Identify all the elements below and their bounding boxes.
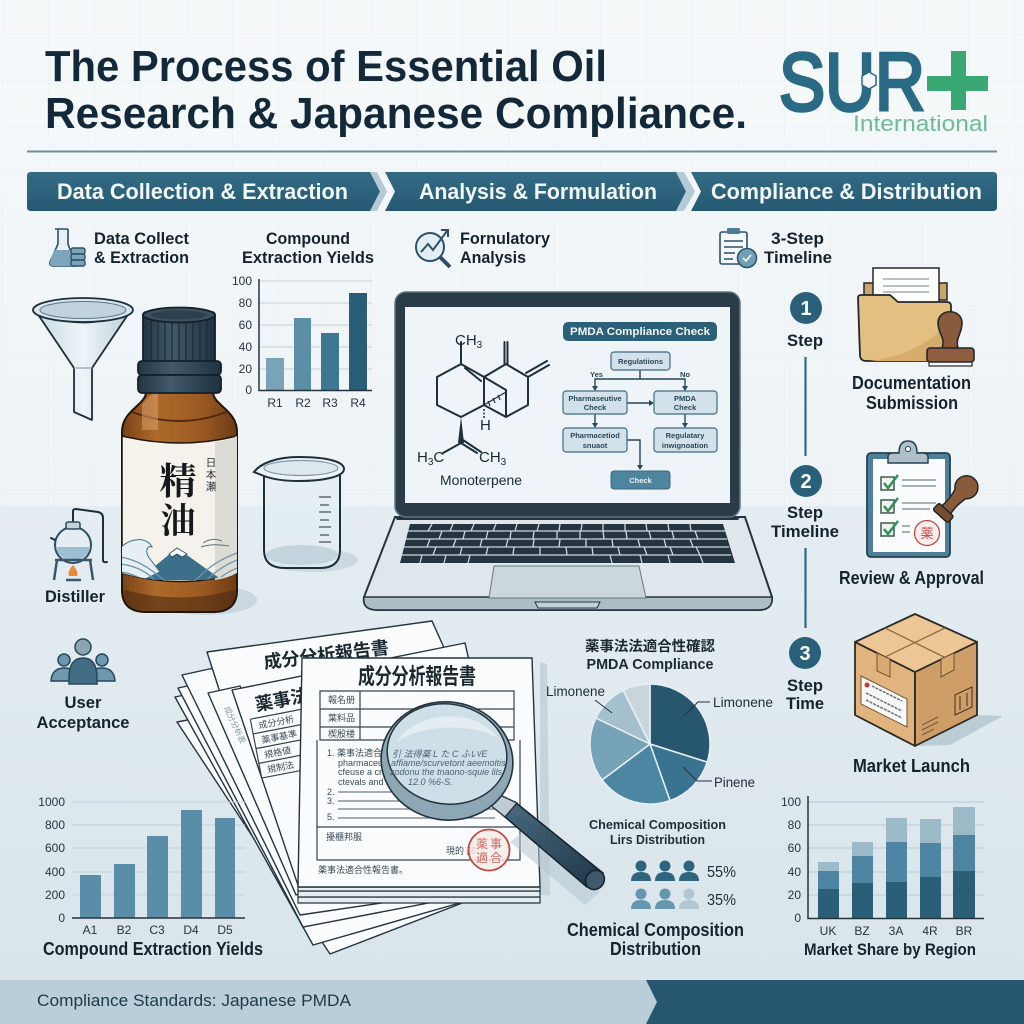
main report page: 5. bbox=[327, 812, 335, 822]
flowchart title bbox=[563, 322, 717, 341]
essential oil bottle bbox=[120, 308, 257, 615]
heading: 3-Step Timeline: 3-Step bbox=[771, 229, 824, 248]
red approval seal: 事 bbox=[490, 837, 502, 851]
bottle label: 日 bbox=[206, 457, 216, 469]
molecule: monoterpene: CH bbox=[479, 449, 501, 466]
pie chart: chemical composition bbox=[590, 684, 712, 804]
magnifying glass: zodonu the tnaono-squie lils bbox=[389, 767, 503, 777]
caption: composition distribution bbox=[589, 817, 726, 847]
bar chart: compound extraction yields A1-D5: 800 bbox=[45, 818, 65, 832]
title bbox=[45, 42, 747, 138]
bottle label: 精 bbox=[160, 451, 196, 505]
bar chart: extraction yields R1-R4: 20 bbox=[239, 362, 252, 376]
footer text: Compliance Standards: Japanese PMDA bbox=[37, 992, 351, 1010]
bar chart: extraction yields R1-R4: R3 bbox=[322, 396, 338, 410]
stamp bbox=[927, 312, 974, 366]
icon: folder with stamp bbox=[858, 268, 974, 366]
flowchart title: PMDA Compliance Check bbox=[570, 326, 711, 338]
heading: Compound Extraction Yields: Compound bbox=[266, 229, 350, 248]
bar chart: extraction yields R1-R4: R1 bbox=[267, 396, 283, 410]
bar chart: extraction yields R1-R4: R2 bbox=[295, 396, 311, 410]
trackpad bbox=[489, 566, 646, 598]
bar chart: compound extraction yields A1-D5 bbox=[38, 795, 263, 959]
stacked bar chart: market share by region: UK bbox=[820, 924, 836, 938]
main report page: cfeuse a cre bbox=[338, 767, 387, 777]
pictogram: people percentages: 35% bbox=[707, 892, 736, 909]
main report page: 報名册 bbox=[328, 694, 355, 705]
molecule: monoterpene: 3 bbox=[477, 340, 483, 351]
pie labels: Pinene bbox=[714, 774, 755, 790]
bar chart: extraction yields R1-R4: 40 bbox=[239, 340, 252, 354]
bar chart: extraction yields R1-R4: 80 bbox=[239, 296, 252, 310]
main report page: 楔殷楼 bbox=[328, 728, 355, 739]
footer bar bbox=[0, 980, 1024, 1024]
bar chart: extraction yields R1-R4: 60 bbox=[239, 318, 252, 332]
step 3: Time bbox=[786, 694, 824, 713]
label: user acceptance bbox=[36, 693, 130, 732]
flowchart: PMDA compliance check: Check bbox=[629, 476, 653, 485]
step 2 bbox=[771, 465, 839, 541]
heading: Fornulatory Analysis bbox=[460, 229, 551, 267]
step 3: 3 bbox=[799, 643, 811, 665]
icon: clipboard with seal and stamp bbox=[867, 441, 983, 557]
bar chart: compound extraction yields A1-D5: 200 bbox=[45, 888, 65, 902]
bar chart: extraction yields R1-R4: 100 bbox=[232, 274, 252, 288]
heading: Data Collect & Extraction: & Extraction bbox=[94, 248, 189, 267]
step 1: 1 bbox=[800, 298, 812, 320]
magnifying glass: 12.0 %6-S. bbox=[408, 777, 453, 787]
heading: Fornulatory Analysis: Analysis bbox=[460, 248, 526, 267]
flowchart: PMDA compliance check: inwignoation bbox=[662, 441, 709, 450]
flowchart: PMDA compliance check: Pharmaseutive bbox=[568, 394, 622, 403]
laptop bbox=[364, 292, 772, 610]
bar chart: compound extraction yields A1-D5: 400 bbox=[45, 865, 65, 879]
stacked bar chart: market share by region: BZ bbox=[854, 924, 870, 938]
fanned back pages: 成分分析報告書 bbox=[262, 636, 390, 673]
pictogram: people percentages: 55% bbox=[707, 864, 736, 881]
heading: PMDA compliance bbox=[585, 638, 715, 673]
main report page: 1. 薬事法適合性 bbox=[327, 747, 391, 758]
stacked bar chart: market share by region: 20 bbox=[788, 888, 801, 902]
heading: chemical composition distribution: Chemical Composition bbox=[567, 919, 744, 940]
red seal: 薬 bbox=[920, 526, 934, 541]
heading: Compound Extraction Yields: Extraction Yields bbox=[242, 248, 374, 267]
logo: SUR+ International: SUR bbox=[779, 37, 925, 128]
pie leader lines bbox=[595, 700, 712, 781]
heading: Compound Extraction Yields bbox=[242, 229, 374, 267]
main report page: pharmaceu bbox=[338, 758, 383, 768]
main report page: 擾櫃邦服 bbox=[326, 831, 362, 842]
main report page bbox=[298, 658, 550, 903]
stacked bar chart: market share by region: 60 bbox=[788, 841, 801, 855]
heading: 3-Step Timeline bbox=[764, 229, 832, 267]
laptop screen frame bbox=[395, 292, 740, 517]
fanned back pages: 薬事法 bbox=[253, 685, 310, 715]
molecule: monoterpene: H bbox=[480, 417, 491, 434]
red approval seal: 薬 bbox=[476, 837, 488, 851]
molecule: monoterpene: CH bbox=[455, 332, 477, 349]
label: review and approval: Review & Approval bbox=[839, 567, 984, 588]
stacked bar chart: market share by region: 4R bbox=[922, 924, 938, 938]
banner stage 2 bbox=[385, 172, 686, 211]
bottle cap bbox=[138, 308, 221, 393]
step 2: 2 bbox=[800, 471, 812, 493]
molecule: monoterpene: 3 bbox=[428, 457, 434, 468]
wooden stamp bbox=[932, 471, 983, 524]
main report page: 2. bbox=[327, 787, 335, 797]
fanned back pages: 薬事基準 bbox=[260, 728, 298, 745]
main report page: 現的 部 bbox=[446, 845, 476, 856]
icon: shipping box bbox=[855, 614, 1003, 746]
stacked bar chart: market share by region: 40 bbox=[788, 865, 801, 879]
label: market launch: Market Launch bbox=[853, 755, 970, 776]
heading: chemical composition distribution bbox=[567, 919, 744, 959]
caption: composition distribution: Lirs Distribution bbox=[610, 832, 705, 847]
pie labels: Limonene bbox=[546, 683, 605, 699]
bar chart: extraction yields R1-R4: 0 bbox=[245, 383, 252, 397]
bar chart: compound extraction yields A1-D5: 1000 bbox=[38, 795, 65, 809]
flowchart: PMDA compliance check: Pharmacetiod bbox=[570, 431, 620, 440]
banner stage 1 bbox=[27, 172, 380, 211]
fanned back pages: 規制法 bbox=[266, 759, 295, 775]
fanned back pages bbox=[175, 621, 520, 954]
bar chart: compound extraction yields A1-D5: A1 bbox=[83, 923, 98, 937]
molecule: monoterpene: C bbox=[433, 449, 444, 466]
icon: distiller: Distiller bbox=[45, 587, 105, 606]
flowchart: PMDA compliance check: Check bbox=[674, 403, 697, 412]
icon: user group bbox=[51, 639, 115, 684]
red approval seal bbox=[468, 830, 510, 870]
title: Research & Japanese Compliance. bbox=[45, 89, 747, 138]
bar chart: compound extraction yields A1-D5: C3 bbox=[149, 923, 165, 937]
flowchart: PMDA compliance check: No bbox=[680, 370, 690, 379]
red approval seal: 適 bbox=[476, 851, 488, 865]
magnifying glass: affiame/scurvetont aeemoltis bbox=[391, 758, 506, 768]
bar chart: compound extraction yields A1-D5: Compound Extraction Yields bbox=[43, 938, 263, 959]
main report page: 薬事法適合性報告書。 bbox=[318, 864, 408, 875]
banner stage 1: Data Collection & Extraction bbox=[57, 179, 348, 204]
timeline: three steps bbox=[771, 292, 839, 713]
fanned back pages: 規格値 bbox=[263, 744, 292, 760]
molecule: monoterpene: Monoterpene bbox=[440, 473, 522, 488]
magnifying glass bbox=[373, 693, 608, 905]
bar chart: compound extraction yields A1-D5: 0 bbox=[58, 911, 65, 925]
bar chart: compound extraction yields A1-D5: B2 bbox=[117, 923, 132, 937]
stacked bar chart: market share by region: 3A bbox=[889, 924, 903, 938]
step 3 bbox=[786, 637, 824, 713]
molecule: monoterpene: H bbox=[417, 449, 428, 466]
step 1 bbox=[787, 292, 823, 350]
flowchart: PMDA compliance check: PMDA bbox=[674, 394, 697, 403]
step 3: Step bbox=[787, 676, 823, 695]
heading: Data Collect & Extraction bbox=[94, 229, 189, 267]
fanned back pages: 成分分析表 bbox=[222, 705, 248, 745]
heading: chemical composition distribution: Distribution bbox=[610, 938, 701, 959]
bottle label: 本 bbox=[206, 468, 217, 481]
logo: SUR+ International: International bbox=[853, 111, 988, 136]
stacked bar chart: market share by region: Market Share by Region bbox=[804, 940, 976, 959]
molecule: monoterpene: 3 bbox=[501, 457, 507, 468]
bar chart: compound extraction yields A1-D5: D4 bbox=[183, 923, 199, 937]
title: The Process of Essential Oil bbox=[45, 42, 607, 91]
bottle label: 瀬 bbox=[206, 480, 217, 493]
bar chart: compound extraction yields A1-D5: D5 bbox=[217, 923, 233, 937]
glass beaker bbox=[254, 457, 358, 572]
icon: timeline checklist bbox=[720, 228, 756, 268]
molecule: monoterpene bbox=[417, 332, 549, 488]
label: documentation submission: Submission bbox=[866, 392, 958, 413]
bottle label: 油 bbox=[160, 494, 196, 544]
icon: glass funnel bbox=[33, 298, 133, 420]
heading: Fornulatory Analysis: Fornulatory bbox=[460, 229, 551, 248]
red approval seal: 合 bbox=[490, 851, 502, 865]
stacked bar chart: market share by region: 100 bbox=[781, 795, 801, 809]
main report page: 3. bbox=[327, 796, 335, 806]
box shipping label bbox=[861, 676, 907, 727]
flowchart: PMDA compliance check: Regulatary bbox=[666, 431, 705, 440]
heading: 3-Step Timeline: Timeline bbox=[764, 248, 832, 267]
bar chart: extraction yields R1-R4 bbox=[232, 274, 372, 410]
step 1: Step bbox=[787, 331, 823, 350]
bar chart: compound extraction yields A1-D5: 600 bbox=[45, 841, 65, 855]
main report page: ctevals and bbox=[338, 777, 384, 787]
banner stage 2: Analysis & Formulation bbox=[419, 179, 657, 204]
stacked bar chart: market share by region bbox=[781, 795, 984, 959]
icon: magnifier with trend bbox=[416, 230, 450, 267]
magnifying glass: 引 法得薬 L た C ふい/E bbox=[392, 749, 488, 759]
flowchart: PMDA compliance check: Check bbox=[584, 403, 607, 412]
step 2: Timeline bbox=[771, 522, 839, 541]
fanned back pages: 成分分析 bbox=[258, 713, 295, 731]
stacked bar chart: market share by region: 0 bbox=[794, 911, 801, 925]
caption: composition distribution: Chemical Composition bbox=[589, 817, 726, 832]
pie labels: Limonene bbox=[713, 694, 773, 710]
keyboard bbox=[400, 524, 735, 563]
icon: flask and cylinders bbox=[50, 229, 85, 266]
icon: distiller bbox=[45, 509, 107, 606]
laptop base bbox=[364, 517, 772, 610]
banner stage 3: Compliance & Distribution bbox=[711, 179, 982, 204]
pie labels bbox=[546, 683, 773, 790]
flowchart: PMDA compliance check bbox=[563, 322, 717, 489]
main report page: 成分分析報告書 bbox=[358, 664, 476, 689]
bottle label bbox=[120, 436, 240, 590]
process banner bbox=[27, 172, 997, 211]
heading: PMDA compliance: PMDA Compliance bbox=[586, 656, 714, 673]
stacked bar chart: market share by region: BR bbox=[956, 924, 973, 938]
pictogram: people percentages bbox=[631, 860, 736, 909]
main report page: 葉料品 bbox=[328, 712, 355, 723]
label: user acceptance: User bbox=[64, 693, 102, 712]
banner stage 3 bbox=[691, 172, 997, 211]
label: user acceptance: Acceptance bbox=[36, 713, 130, 732]
stacked bar chart: market share by region: 80 bbox=[788, 818, 801, 832]
flowchart: PMDA compliance check: Regulatiions bbox=[618, 357, 663, 366]
heading: Data Collect & Extraction: Data Collect bbox=[94, 229, 189, 248]
display panel bbox=[405, 307, 730, 503]
heading: PMDA compliance: 薬事法法適合性確認 bbox=[585, 638, 715, 654]
flowchart: PMDA compliance check: snuaot bbox=[583, 441, 608, 450]
step 2: Step bbox=[787, 503, 823, 522]
flowchart: PMDA compliance check: Yes bbox=[590, 370, 603, 379]
label: documentation submission: Documentation bbox=[852, 372, 971, 393]
label: documentation submission bbox=[852, 372, 971, 413]
bar chart: extraction yields R1-R4: R4 bbox=[350, 396, 366, 410]
analysis report documents bbox=[175, 621, 608, 954]
